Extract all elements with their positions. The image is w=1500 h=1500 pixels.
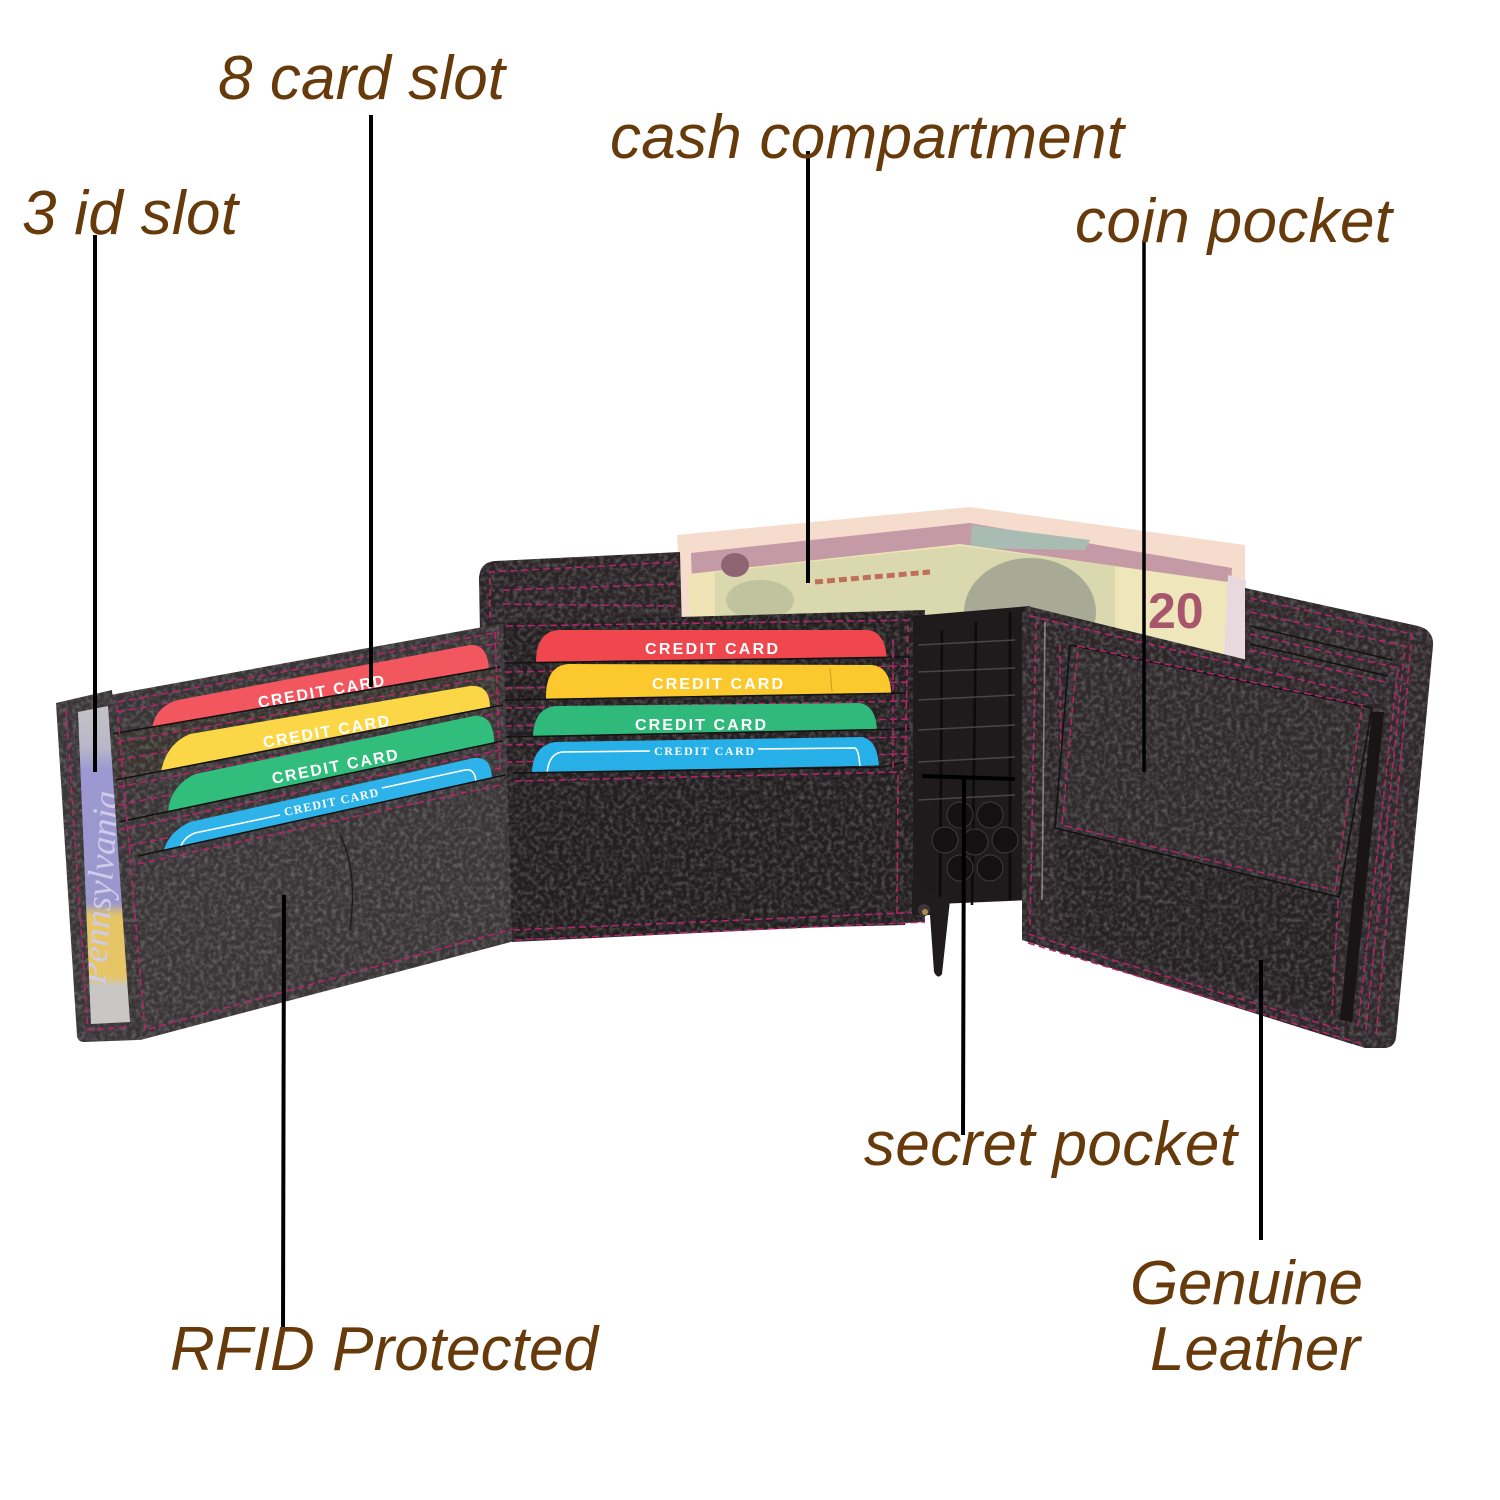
banknotes xyxy=(677,507,1246,666)
card: red: CREDIT CARD xyxy=(645,641,778,658)
card: blue: CREDIT CARD xyxy=(283,785,380,819)
panel: left card holder xyxy=(100,623,520,1040)
flap: coin pocket xyxy=(1055,645,1372,897)
card: red xyxy=(536,630,887,680)
slot strip 2 xyxy=(505,692,910,727)
label: 3 id slot: 3 id slot xyxy=(22,179,241,248)
callout line: cash compartment xyxy=(806,151,810,583)
card: green xyxy=(533,703,877,750)
pocket: RFID front xyxy=(117,632,518,1040)
callout line: 8 card slot xyxy=(369,115,373,687)
callout line: secret pocket xyxy=(922,776,1015,1135)
callout line: coin pocket xyxy=(1142,240,1146,772)
label: coin pocket: coin pocket xyxy=(1075,187,1395,256)
label: genuine leather: Leather xyxy=(1150,1315,1362,1384)
label: 8 card slot: 8 card slot xyxy=(218,44,508,113)
pocket: middle front xyxy=(513,625,925,940)
panel: ID window flap xyxy=(56,690,137,1042)
label: RFID protected: RFID Protected xyxy=(170,1315,601,1384)
wallet photo illustration xyxy=(56,507,1433,1048)
panel: right back layers xyxy=(1200,588,1433,1048)
card: blue: CREDIT CARD xyxy=(654,744,754,758)
label: genuine leather: Genuine xyxy=(1130,1249,1363,1318)
panel: right front with coin pocket xyxy=(1022,606,1388,1044)
card: red xyxy=(152,645,489,750)
card: green: CREDIT CARD xyxy=(271,747,399,788)
slot strip 3 xyxy=(119,740,504,848)
card: red: CREDIT CARD xyxy=(257,673,386,712)
card: blue xyxy=(163,758,492,870)
slot strip 1 xyxy=(112,666,500,761)
callout line: genuine leather xyxy=(1259,960,1263,1240)
label: genuine leather xyxy=(1130,1249,1363,1384)
label: cash compartment: cash compartment xyxy=(610,103,1127,172)
pocket: lower coin pocket body xyxy=(1028,830,1362,1044)
panel: crocodile texture spine xyxy=(913,606,1030,905)
callout line: RFID protected xyxy=(283,895,284,1330)
callout line: 3 id slot xyxy=(93,235,97,772)
card: yellow: CREDIT CARD xyxy=(262,713,391,752)
label: secret pocket: secret pocket xyxy=(864,1110,1240,1179)
panel: back flap behind middle xyxy=(479,552,682,632)
stitching: back flap xyxy=(490,562,678,618)
banknotes: 20 xyxy=(1148,583,1204,639)
card: green xyxy=(168,716,494,830)
slot strip 3 xyxy=(506,728,910,763)
card: yellow xyxy=(161,686,490,790)
panel: middle card holder xyxy=(503,610,925,942)
panel: ID window flap: Pennsylvania xyxy=(73,789,127,987)
tab with snap xyxy=(912,880,950,977)
card: yellow: CREDIT CARD xyxy=(652,676,783,693)
card: yellow xyxy=(546,664,891,712)
card: green: CREDIT CARD xyxy=(635,717,766,734)
slot strip 2 xyxy=(116,704,503,806)
card: blue xyxy=(532,737,879,785)
stitching: right outer edge xyxy=(1250,598,1412,1036)
slot strip 1 xyxy=(505,656,910,689)
